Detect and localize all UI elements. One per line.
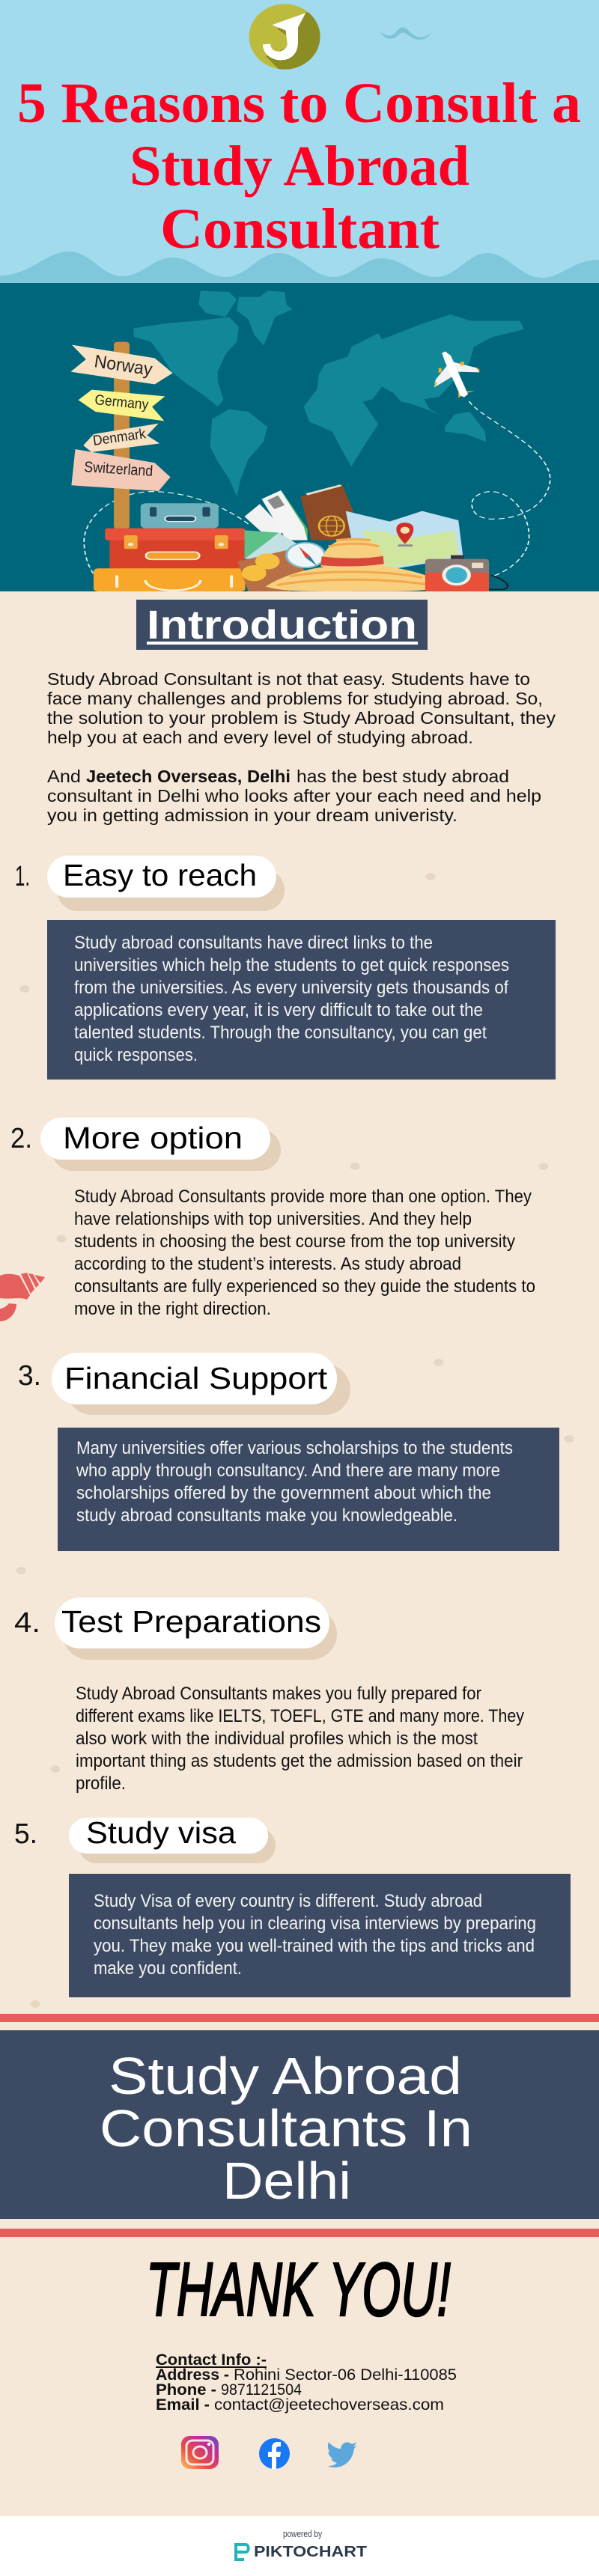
reason 4 text [76,1684,524,1794]
reason 4 text: Study Abroad Consultants makes you fully prepared for [76,1684,481,1704]
banner: Study Abroad Consultants In Delhi: Study Abroad [109,2047,462,2105]
icon: logo [249,4,320,70]
dashed flight path [84,401,550,577]
contact info: Phone - [156,2381,216,2399]
contact info: Address - [156,2366,229,2384]
icon: tickets [245,490,308,541]
contact info: Rohini Sector-06 Delhi-110085 [234,2366,457,2384]
footer [0,2516,599,2576]
reason 5 panel [69,1874,571,1997]
reason 2 heading [10,1118,281,1171]
intro text: Jeetech Overseas, Delhi [86,767,291,786]
intro text: And [47,767,81,786]
reason 3 panel: scholarships offered by the government about which the [76,1483,491,1503]
reason 3 heading: Financial Support [64,1361,328,1395]
reason 5 heading: Study visa [86,1815,236,1850]
reason 1 heading: Easy to reach [63,858,257,892]
sign: Germany: Germany [94,392,150,413]
waves [0,252,599,283]
icon: blue suitcase [141,503,219,529]
icon: small wave [380,27,432,40]
reason 2 text: have relationships with top universities. And they help [74,1209,472,1229]
sign: Norway: Norway [93,351,153,380]
decorative dots [16,873,574,2008]
reason 2 text: students in choosing the best course from the top university [74,1231,515,1252]
title: Study Abroad [130,135,469,198]
world map [134,290,524,496]
reason 2 text: Study Abroad Consultants provide more than one option. They [74,1187,532,1207]
intro text: you in getting admission in your dream univeristy. [47,806,457,825]
icon: passport [301,484,353,541]
reason 1 panel: quick responses. [74,1045,198,1065]
reason 4 text: important thing as students get the admission based on their [76,1751,523,1771]
contact info: 9871121504 [221,2381,302,2399]
piktochart wordmark: PIKTOCHART [254,2544,367,2560]
banner: Study Abroad Consultants In Delhi: Delhi [222,2152,351,2210]
reason 4 heading: 4. [14,1607,40,1639]
title: Consultant [160,198,440,261]
reason 1 panel: universities which help the students to get quick responses [74,955,509,975]
hero illustration panel [0,283,599,591]
title: 5 Reasons to Consult a [17,72,581,135]
reason 5 panel: consultants help you in clearing visa interviews by preparing [94,1913,536,1934]
header panel [0,0,599,283]
red stripe top [0,2014,599,2022]
reason 5 panel: make you confident. [94,1958,242,1979]
reason 2 heading: More option [63,1121,243,1155]
contact info [156,2351,457,2414]
signpost [70,342,173,529]
contact info: Contact Info :- [156,2351,267,2369]
thank you heading: THANK YOU! [146,2248,451,2332]
intro text: the solution to your problem is Study Abroad Consultant, they [47,708,556,728]
reason 3 panel: who apply through consultancy. And there are many more [76,1461,500,1481]
reason 2 text: according to the student’s interests. As study abroad [74,1254,461,1274]
red stripe bottom [0,2229,599,2237]
sign: Switzerland: Switzerland [84,459,153,480]
reason 5 heading [14,1815,276,1863]
icon: map [346,511,463,570]
reason 1 heading [15,856,285,911]
icon: instagram [181,2436,219,2469]
title [17,72,581,261]
icon: yellow suitcase [94,568,246,591]
icon: facebook [259,2438,290,2469]
reason 3 panel [58,1428,559,1551]
intro text: face many challenges and problems for studying abroad. So, [47,689,543,708]
reason 4 text: different exams like IELTS, TOEFL, GTE and many more. They [76,1706,524,1726]
banner: Study Abroad Consultants In Delhi: Consultants In [100,2099,472,2158]
reason 3 panel: study abroad consultants make you knowledgeable. [76,1505,457,1526]
reason 4 heading: Test Preparations [61,1604,321,1639]
icon: twitter [328,2442,357,2467]
icon: compass [287,543,325,567]
reason 3 heading [18,1353,350,1415]
reason 1 panel: talented students. Through the consultancy, you can get [74,1023,487,1043]
contact info: contact@jeetechoverseas.com [214,2396,444,2414]
luggage and travel items [94,484,508,591]
powered by: powered by [283,2528,322,2539]
icon: sea shell [0,1273,45,1321]
page background [0,591,599,2516]
intro text: has the best study abroad [297,767,509,786]
reason 2 text: move in the right direction. [74,1299,271,1319]
intro text: consultant in Delhi who looks after your each need and help [47,786,541,806]
icon: red suitcase [105,529,246,570]
intro text: Study Abroad Consultant is not that easy. Students have to [47,669,530,689]
intro text: help you at each and every level of studying abroad. [47,728,473,747]
reason 3 heading: 3. [18,1360,41,1392]
reason 3 panel: Many universities offer various scholarships to the students [76,1438,513,1458]
reason 2 heading: 2. [10,1123,32,1154]
intro text [47,669,556,825]
reason 1 panel [47,920,556,1080]
reason 5 panel: Study Visa of every country is different. Study abroad [94,1891,482,1911]
contact info: Email - [156,2396,210,2414]
reason 5 panel: you. They make you well-trained with the tips and tricks and [94,1936,535,1956]
icon: sun hat [266,538,445,591]
banner: Study Abroad Consultants In Delhi [0,2030,599,2219]
sign: Denmark: Denmark [92,426,147,449]
reason 2 text: consultants are fully experienced so they guide the students to [74,1276,535,1297]
reason 1 panel: Study abroad consultants have direct links to the [74,933,433,953]
icon: airplane [434,351,479,398]
reason 4 heading [14,1598,337,1660]
icon: wallet with coins and card [237,530,305,591]
reason 1 heading: 1. [15,861,30,892]
heading: Introduction: Introduction [147,603,417,648]
reason 1 panel: from the universities. As every university gets thousands of [74,978,508,998]
reason 4 text: profile. [76,1773,126,1794]
icon: camera [425,555,508,591]
reason 1 panel: applications every year, it is very difficult to take out the [74,1000,483,1020]
reason 4 text: also work with the individual profiles which is the most [76,1729,478,1749]
icon: piktochart logo [236,2545,249,2560]
reason 2 text [74,1187,535,1319]
reason 5 heading: 5. [14,1818,37,1850]
